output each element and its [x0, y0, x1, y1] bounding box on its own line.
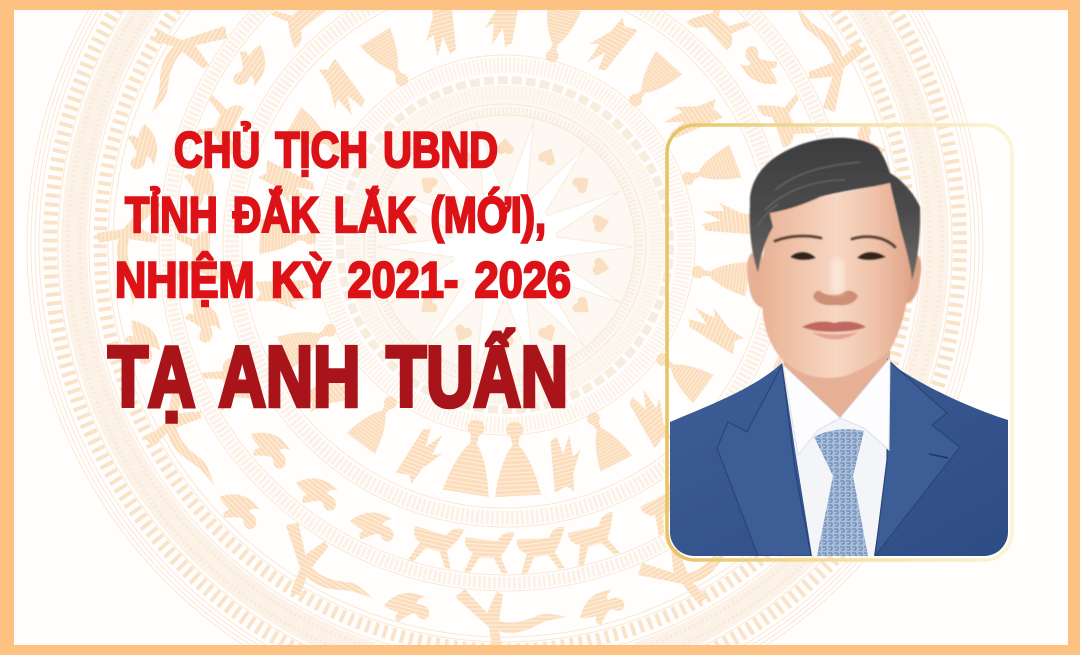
title line 2: TỈNH ĐẮK LẮK (MỚI), [125, 187, 546, 243]
nose highlight [831, 258, 844, 294]
shirt [782, 362, 890, 556]
right lapel [875, 360, 960, 556]
suit [670, 363, 1008, 556]
necktie [814, 429, 868, 556]
face [761, 183, 912, 378]
eyes [790, 252, 886, 260]
grey hair strands [758, 162, 860, 225]
nose [813, 291, 858, 305]
left lapel [717, 365, 811, 556]
mouth [802, 322, 866, 332]
ears [746, 252, 764, 308]
official name: TẠ ANH TUẤN [108, 329, 568, 425]
title line 1: CHỦ TỊCH UBND [174, 121, 498, 178]
title line 3: NHIỆM KỲ 2021- 2026 [115, 252, 571, 308]
eyebrows [775, 236, 895, 247]
portrait illustration [670, 138, 1008, 556]
title [108, 121, 571, 425]
shirt collar [783, 358, 890, 455]
lapel buttonhole [929, 454, 948, 458]
portrait frame [667, 125, 1012, 560]
neck [784, 348, 890, 418]
hair [750, 138, 920, 280]
